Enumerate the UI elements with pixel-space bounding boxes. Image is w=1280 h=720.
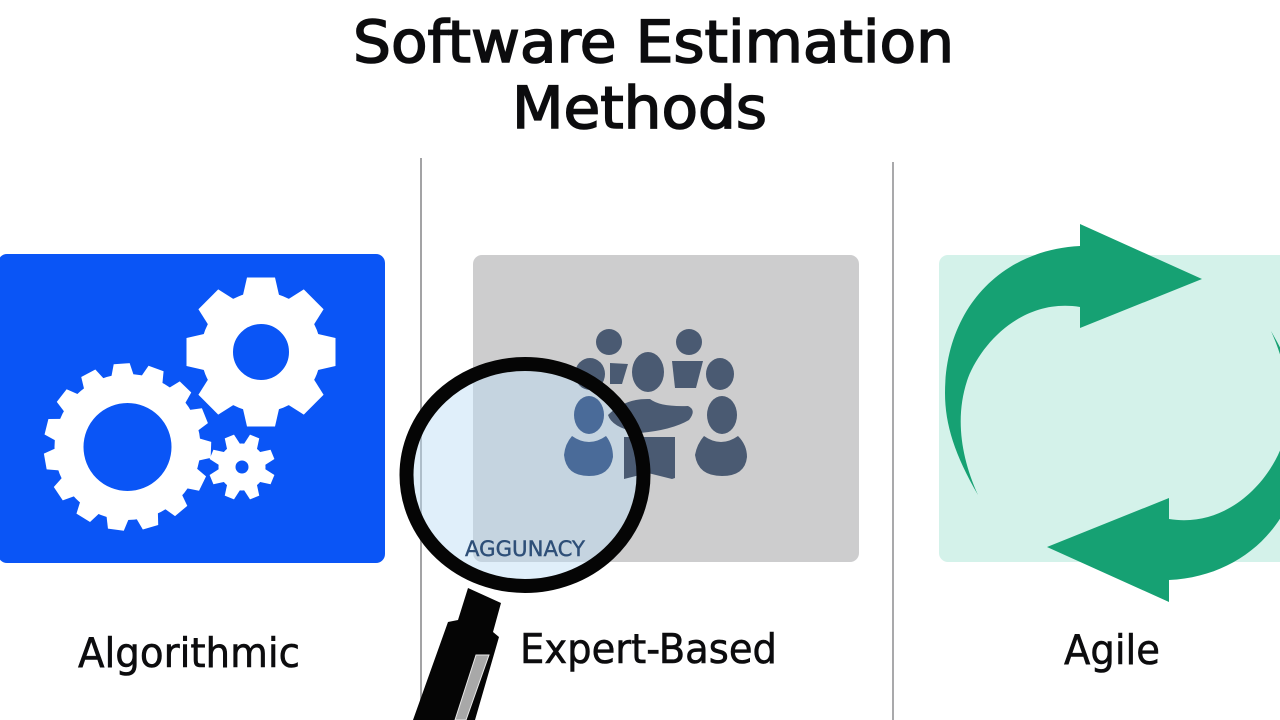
title: Software Estimation — [353, 8, 954, 76]
arrow: top curved — [945, 224, 1202, 495]
icon: magnifying glass — [406, 364, 644, 720]
handle — [413, 588, 501, 720]
icon: small gear — [209, 434, 275, 500]
handle highlight — [455, 655, 489, 720]
label: agile: Agile — [1064, 626, 1160, 674]
title — [353, 8, 954, 142]
label: algorithmic: Algorithmic — [78, 629, 300, 677]
lens tint — [406, 364, 644, 586]
panel: algorithmic — [0, 254, 385, 563]
panel: agile — [939, 224, 1280, 602]
icon: gears — [43, 278, 335, 531]
panel: expert-based — [473, 255, 859, 562]
icon: large gear — [43, 363, 211, 531]
icon: medium gear — [186, 278, 336, 426]
icon: cycle arrows — [945, 224, 1280, 602]
panel background: mint — [939, 255, 1280, 562]
panel background: blue — [0, 254, 385, 563]
label: expert-based: Expert-Based — [520, 625, 777, 673]
icon: group of people — [564, 329, 747, 479]
panel background: gray — [473, 255, 859, 562]
lens text: AGGUNACY — [465, 537, 585, 561]
arrow: bottom curved — [1047, 331, 1280, 602]
lens ring — [406, 364, 644, 586]
title: Methods — [512, 74, 767, 142]
